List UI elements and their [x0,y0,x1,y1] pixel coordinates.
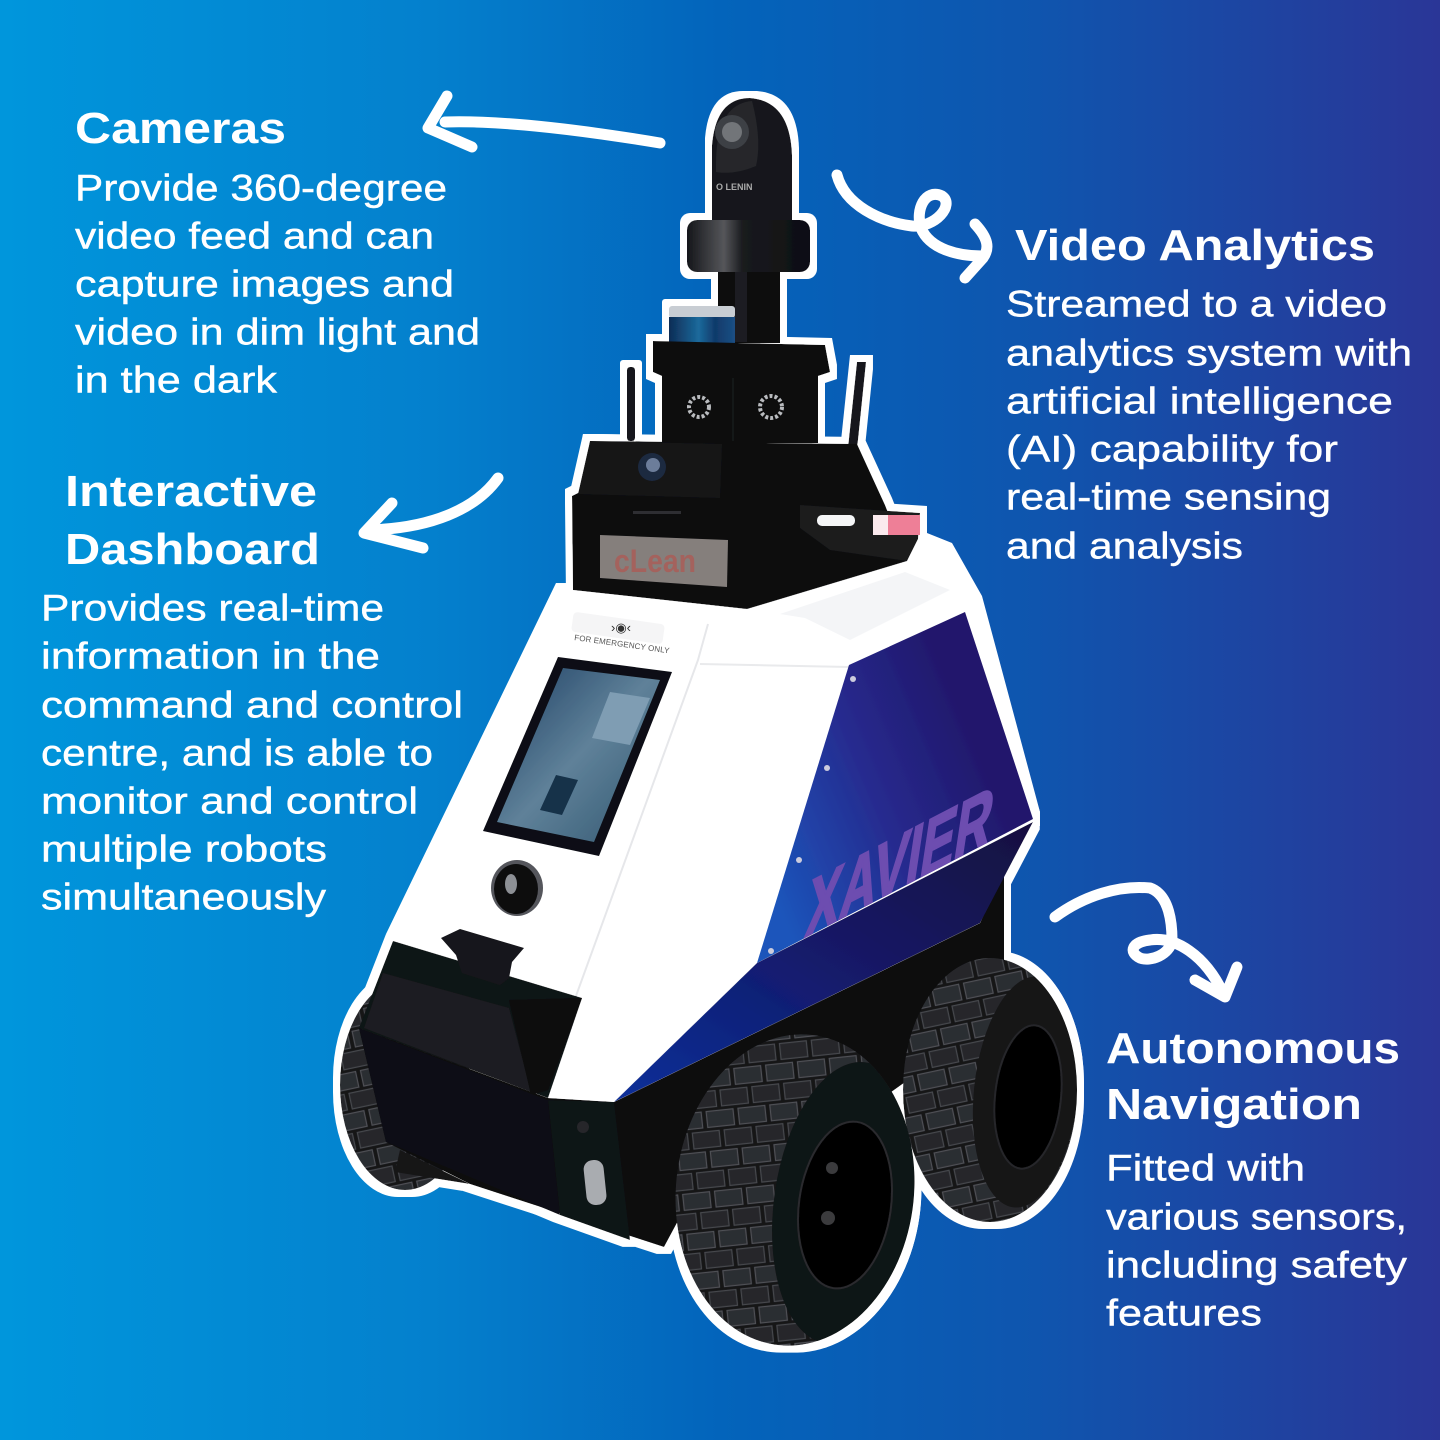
text block: cameras description: capture images and [75,264,454,304]
arrow: autonomous navigation [1055,887,1237,997]
callout: interactive dashboard [41,467,463,918]
text block: navigation description [1106,1148,1408,1334]
side indicator module [800,505,920,561]
head unit [572,441,907,609]
heading: cameras: Cameras [75,104,286,153]
text block: video analytics description [1006,284,1412,566]
mounting ring and column [687,220,810,343]
text block: video analytics description: Streamed to a video [1006,284,1387,324]
sensor block [653,341,830,443]
rear left wheel [340,980,470,1190]
antennas [627,362,866,505]
heading: interactive dashboard: Dashboard [65,525,320,574]
text block: cameras description [75,168,480,400]
heading: autonomous navigation [1106,1024,1400,1129]
touch screen dashboard [483,657,672,856]
front bumper with speaker [359,941,582,1215]
text block: dashboard description: Provides real-time [41,588,384,628]
LED display: cLean [614,543,696,579]
text block: dashboard description: simultaneously [41,876,327,918]
rear right wheel [903,958,1090,1222]
text block: video analytics description: analytics system with [1006,332,1412,374]
emergency sticker [574,620,671,655]
LED display [600,535,728,587]
text block: navigation description: features [1106,1292,1262,1334]
purple side panel with XAVIER: XAVIER [800,768,1000,959]
arrow: cameras [428,96,660,147]
arrow: interactive dashboard [364,478,498,548]
heading: autonomous navigation: Navigation [1106,1080,1362,1129]
callout: autonomous navigation [1106,1024,1408,1334]
emergency sticker: ›◉‹ [611,620,631,635]
text block: dashboard description [41,588,463,918]
text block: cameras description: in the dark [75,360,278,400]
text block: dashboard description: centre, and is able to [41,732,433,774]
text block: navigation description: various sensors, [1106,1196,1407,1238]
text block: cameras description: Provide 360-degree [75,168,447,208]
heading: video analytics: Video Analytics [1015,221,1375,270]
text block: navigation description: including safety [1106,1244,1408,1286]
text block: dashboard description: multiple robots [41,828,327,870]
front right wheel [674,1034,922,1353]
heading: autonomous navigation: Autonomous [1106,1024,1400,1073]
callout: cameras [75,104,480,400]
heading: interactive dashboard: Interactive [65,467,317,516]
heading: interactive dashboard [65,467,320,574]
emergency sticker: FOR EMERGENCY ONLY [574,633,671,655]
text block: cameras description: video feed and can [75,216,434,256]
text block: navigation description: Fitted with [1106,1148,1305,1188]
arrow: video analytics [837,175,987,278]
text block: dashboard description: command and control [41,684,463,726]
text block: dashboard description: information in the [41,636,380,676]
text block: dashboard description: monitor and control [41,780,418,822]
top sensor bump [441,929,524,985]
text block: video analytics description: real-time sensing [1006,476,1331,518]
camera dome head [712,98,792,222]
camera dome head: O LENIN [716,182,753,192]
text block: video analytics description: (AI) capability for [1006,428,1338,470]
white body shell [393,540,1033,1102]
text block: video analytics description: and analysis [1006,526,1243,566]
lower chassis [359,870,1004,1247]
text block: video analytics description: artificial intelligence [1006,380,1393,422]
dome camera [491,860,543,916]
purple side panel with XAVIER [614,612,1033,1102]
robot illustration [340,98,1090,1358]
lidar sensor [669,306,735,343]
callout: video analytics [1006,221,1412,566]
text block: cameras description: video in dim light and [75,312,480,352]
